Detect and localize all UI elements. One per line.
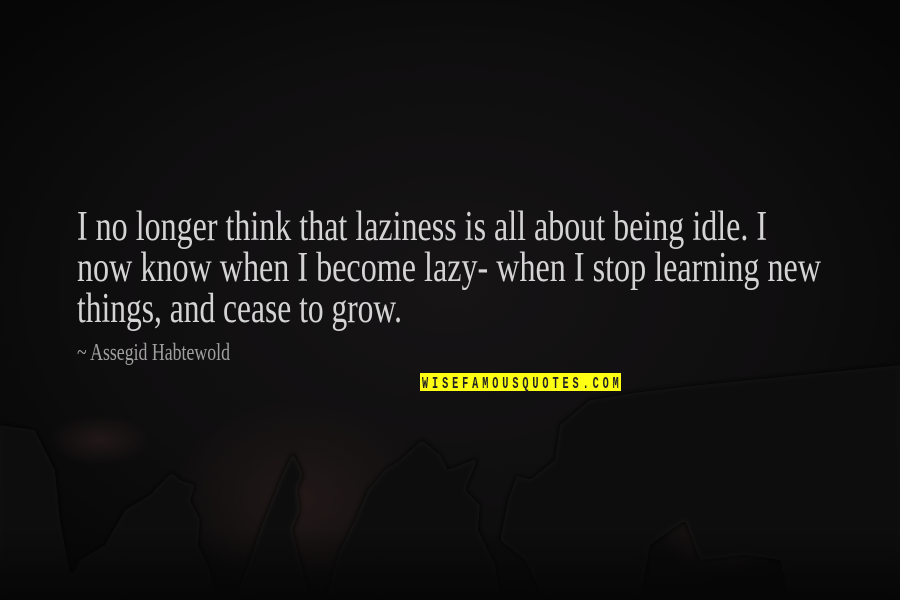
background: foreground shade bbox=[0, 530, 900, 600]
watermark badge: WISEFAMOUSQUOTES.COM bbox=[422, 375, 619, 394]
quote line 3: things, and cease to grow. bbox=[77, 286, 402, 332]
background: tree silhouettes bbox=[0, 365, 900, 600]
attribution: ~ Assegid Habtewold bbox=[77, 340, 230, 366]
quote text bbox=[77, 204, 822, 332]
